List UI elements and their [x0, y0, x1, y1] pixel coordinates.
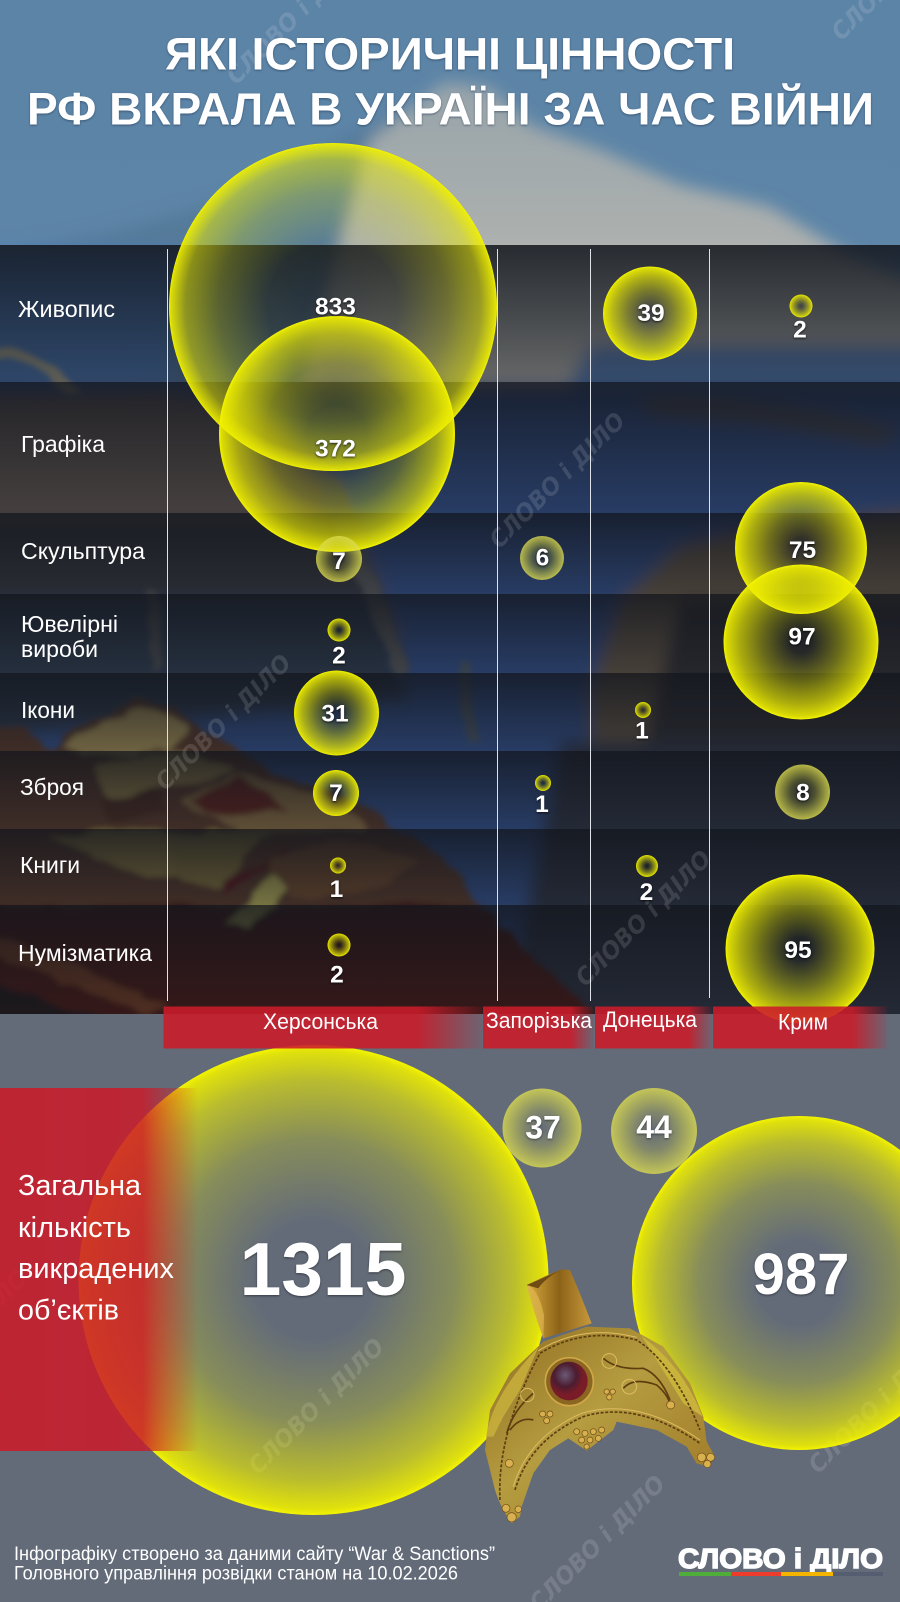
table numbers: 6 [536, 544, 549, 572]
total numbers: 44 [636, 1109, 672, 1145]
table numbers: 2 [332, 642, 346, 670]
title: РФ ВКРАЛА В УКРАЇНІ ЗА ЧАС ВІЙНИ [27, 82, 874, 134]
table numbers: 7 [329, 780, 343, 807]
watermarks: СЛОВО і ДІЛО [243, 1333, 390, 1480]
background painting [0, 0, 900, 1040]
watermarks: СЛОВО і ДІЛО [150, 649, 297, 796]
bubbles: Крим [724, 294, 878, 1024]
table numbers [315, 293, 816, 988]
table numbers: 31 [321, 700, 349, 728]
total numbers [240, 1109, 849, 1311]
row labels [18, 296, 152, 966]
table numbers: 39 [637, 300, 665, 327]
table numbers: 2 [793, 316, 807, 344]
row labels: Зброя [20, 774, 84, 800]
row labels: Ювелірні [21, 611, 118, 637]
row labels: Ікони [21, 697, 75, 723]
table numbers: 75 [789, 537, 816, 564]
region labels: Донецька [603, 1007, 698, 1032]
table numbers: 1 [330, 876, 343, 903]
dark table bands [0, 245, 900, 1014]
icon: gold crescent pendant [485, 1269, 715, 1523]
total numbers: 1315 [240, 1227, 406, 1311]
logo: СЛОВО і ДІЛО [678, 1543, 883, 1574]
table numbers: 95 [784, 937, 812, 964]
watermarks: СЛОВО і ДІЛО [570, 845, 717, 992]
title [27, 28, 874, 134]
table numbers: 1 [635, 718, 649, 744]
table numbers: 2 [330, 962, 344, 988]
title: ЯКІ ІСТОРИЧНІ ЦІННОСТІ [165, 28, 735, 80]
footer source text: Інфографіку створено за даними сайту “War & Sanctions” [14, 1544, 495, 1565]
row labels: Скульптура [21, 538, 145, 564]
table numbers: 372 [315, 436, 356, 463]
table numbers: 8 [796, 780, 810, 806]
row labels: Графіка [21, 431, 105, 457]
footer source text: Головного управління розвідки станом на 10.02.2026 [14, 1564, 458, 1584]
row labels: Живопис [18, 296, 115, 322]
table numbers: 7 [332, 548, 346, 575]
panel: total label: об’єктів [18, 1294, 119, 1326]
panel: total label: Загальна [18, 1170, 142, 1202]
bubbles: Донецька [603, 266, 697, 877]
total numbers: 987 [753, 1242, 849, 1307]
region labels: Крим [778, 1010, 828, 1034]
row labels: вироби [21, 636, 98, 662]
panel: total label: викрадених [18, 1253, 174, 1285]
total bubbles [78, 1045, 900, 1515]
row labels: Нумізматика [18, 940, 152, 966]
bubbles: Херсонська [169, 143, 497, 956]
total numbers: 37 [525, 1110, 561, 1146]
table numbers: 1 [535, 791, 549, 818]
table numbers: 97 [788, 624, 816, 650]
panel: total label: кількість [18, 1212, 131, 1244]
bubbles: Запорізька [520, 536, 564, 791]
region labels: Херсонська [263, 1009, 379, 1034]
table numbers: 833 [315, 293, 356, 320]
footer source text [14, 1544, 495, 1584]
table numbers: 2 [640, 879, 653, 906]
watermarks: СЛОВО і ДІЛО [484, 407, 631, 554]
panel: total label [0, 1088, 198, 1451]
region labels [164, 1006, 887, 1048]
row labels: Книги [20, 852, 80, 878]
region labels: Запорізька [486, 1008, 593, 1033]
